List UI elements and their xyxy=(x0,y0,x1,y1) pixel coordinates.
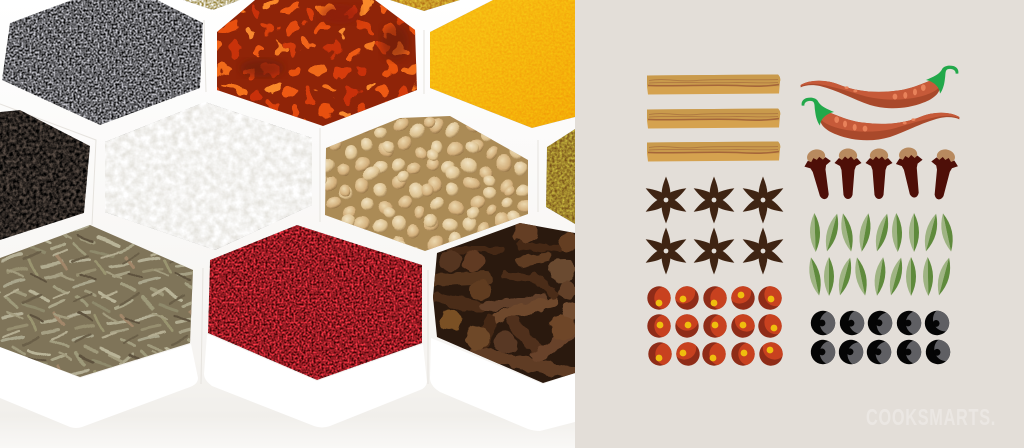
bowl shadows xyxy=(0,20,538,384)
spice: chili flakes xyxy=(217,0,417,126)
bowl: sumac front wall xyxy=(204,334,427,428)
spice: poppy seeds xyxy=(2,0,203,125)
spice: black seeds xyxy=(0,110,90,240)
bowl: cloves front wall xyxy=(430,338,575,431)
spice: green mustard powder xyxy=(546,129,575,224)
icon: star anise xyxy=(643,176,786,274)
panel: spice photo xyxy=(0,0,580,448)
spice: whole cloves xyxy=(433,223,575,383)
spice: turmeric xyxy=(430,0,575,128)
spice: dried thyme xyxy=(0,225,193,377)
spice: beige seeds at top xyxy=(183,0,240,10)
icon: red chili peppers xyxy=(801,66,959,140)
bowl: thyme front wall xyxy=(0,344,198,428)
icon: cinnamon sticks xyxy=(647,74,780,162)
spice: sumac xyxy=(208,225,422,380)
icon: red peppercorns xyxy=(647,282,787,370)
panel: illustrated spices background xyxy=(575,0,1024,448)
spice: mustard at top xyxy=(390,0,460,11)
spice: salt xyxy=(105,102,312,250)
icon: bay leaves xyxy=(806,212,956,297)
spice: coriander seeds xyxy=(325,116,528,251)
icon: black peppercorns xyxy=(810,307,954,368)
icon: whole cloves xyxy=(801,145,960,202)
